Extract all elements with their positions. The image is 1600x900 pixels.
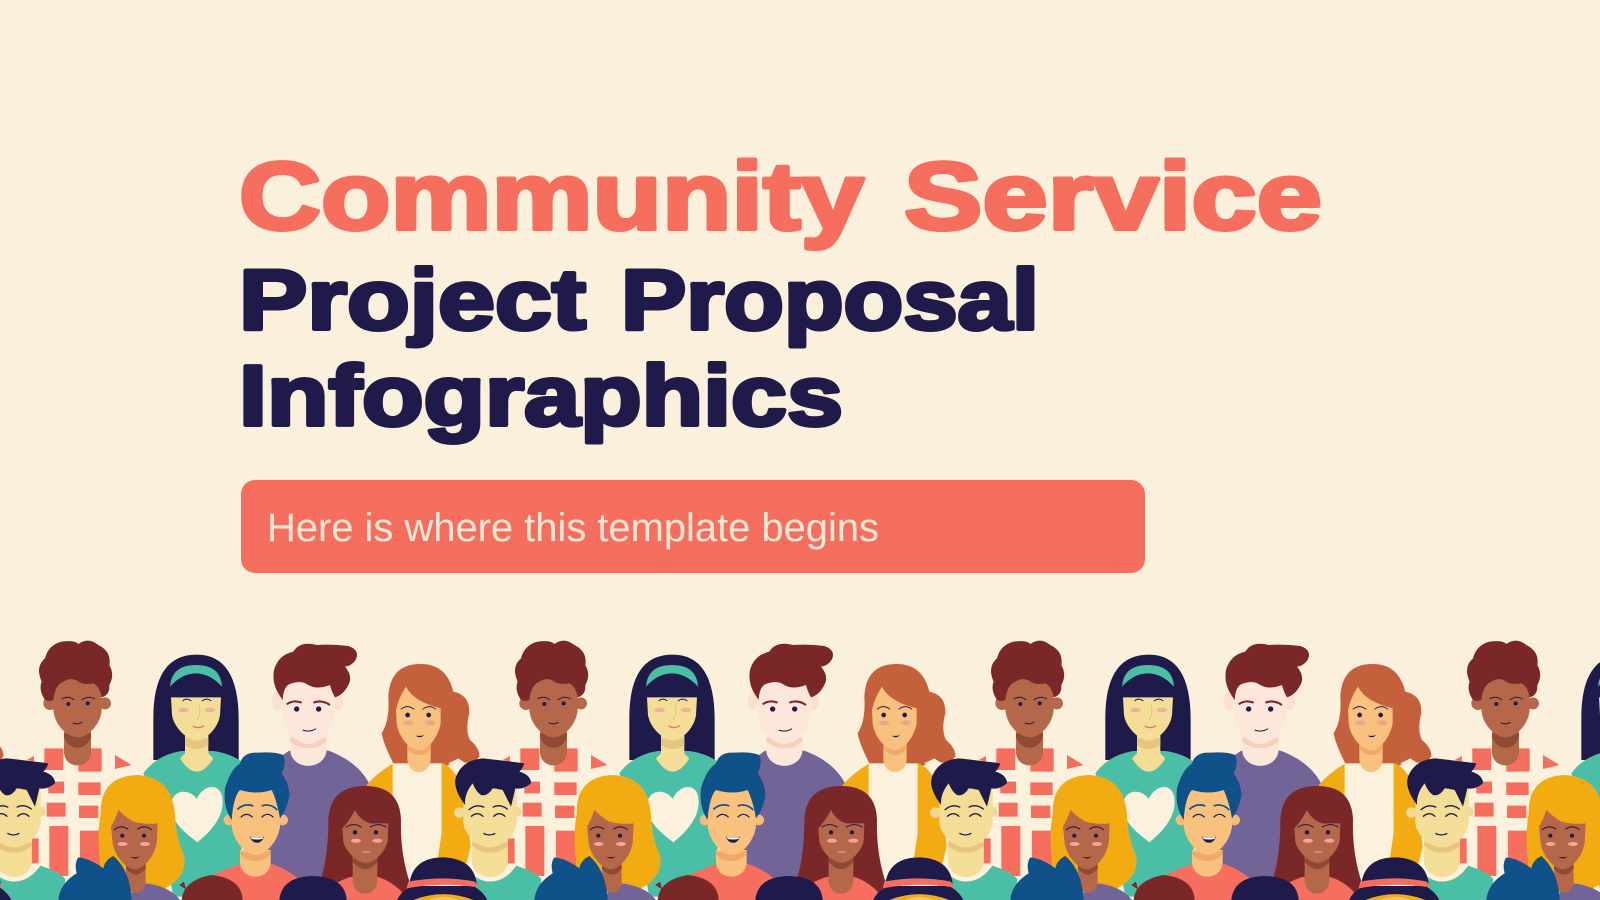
middle row repeat 2 [454,752,886,900]
icon: heart on shirt [171,787,223,842]
head: navy hair [279,876,347,900]
front row repeat 1 [0,856,11,900]
front row repeat 3 [1010,856,1439,900]
title line: Project Proposal [239,253,1039,348]
person: woman with wavy red hair and yellow jacket [367,664,479,877]
back row repeat 2 [499,641,955,897]
person: woman with long dark hair and heart shirt [143,655,242,897]
title line: Project Proposal: Proposal [621,253,1039,348]
front row repeat 4 [1486,856,1600,900]
subtitle text: Here is where this template begins [267,506,879,550]
back row repeat 4 [1451,641,1600,897]
crowd illustration [0,641,1600,900]
front row of head tops [58,856,487,900]
title [239,143,1322,444]
subtitle banner [241,480,1145,573]
head: spiky blue hair [58,856,132,900]
title line: Community Service: Community [239,143,864,250]
back row repeat 3 [975,641,1431,897]
head: navy hat with coral band [397,857,487,900]
middle row repeat 3 [930,752,1362,900]
title line: Project Proposal: Project [239,253,586,348]
back row repeat 1 [0,641,3,897]
person: woman with yellow hair [98,775,185,900]
person: man with curly hair and striped shirt [23,641,138,887]
middle row repeat 4 [1406,752,1600,900]
title line: Community Service [239,143,1322,250]
title line: Infographics: Infographics [239,349,843,444]
person: woman with long auburn hair [322,786,410,900]
person: man with swept hair and purple shirt [257,644,370,883]
person: man with blue hair and coral shirt [210,752,300,900]
title line: Community Service: Service [904,143,1322,250]
front row repeat 2 [534,856,963,900]
person: man with black hair and teal shirt [0,758,65,900]
middle row of people [0,752,410,900]
back row of people [23,641,479,897]
head: dark red hair [179,875,243,900]
